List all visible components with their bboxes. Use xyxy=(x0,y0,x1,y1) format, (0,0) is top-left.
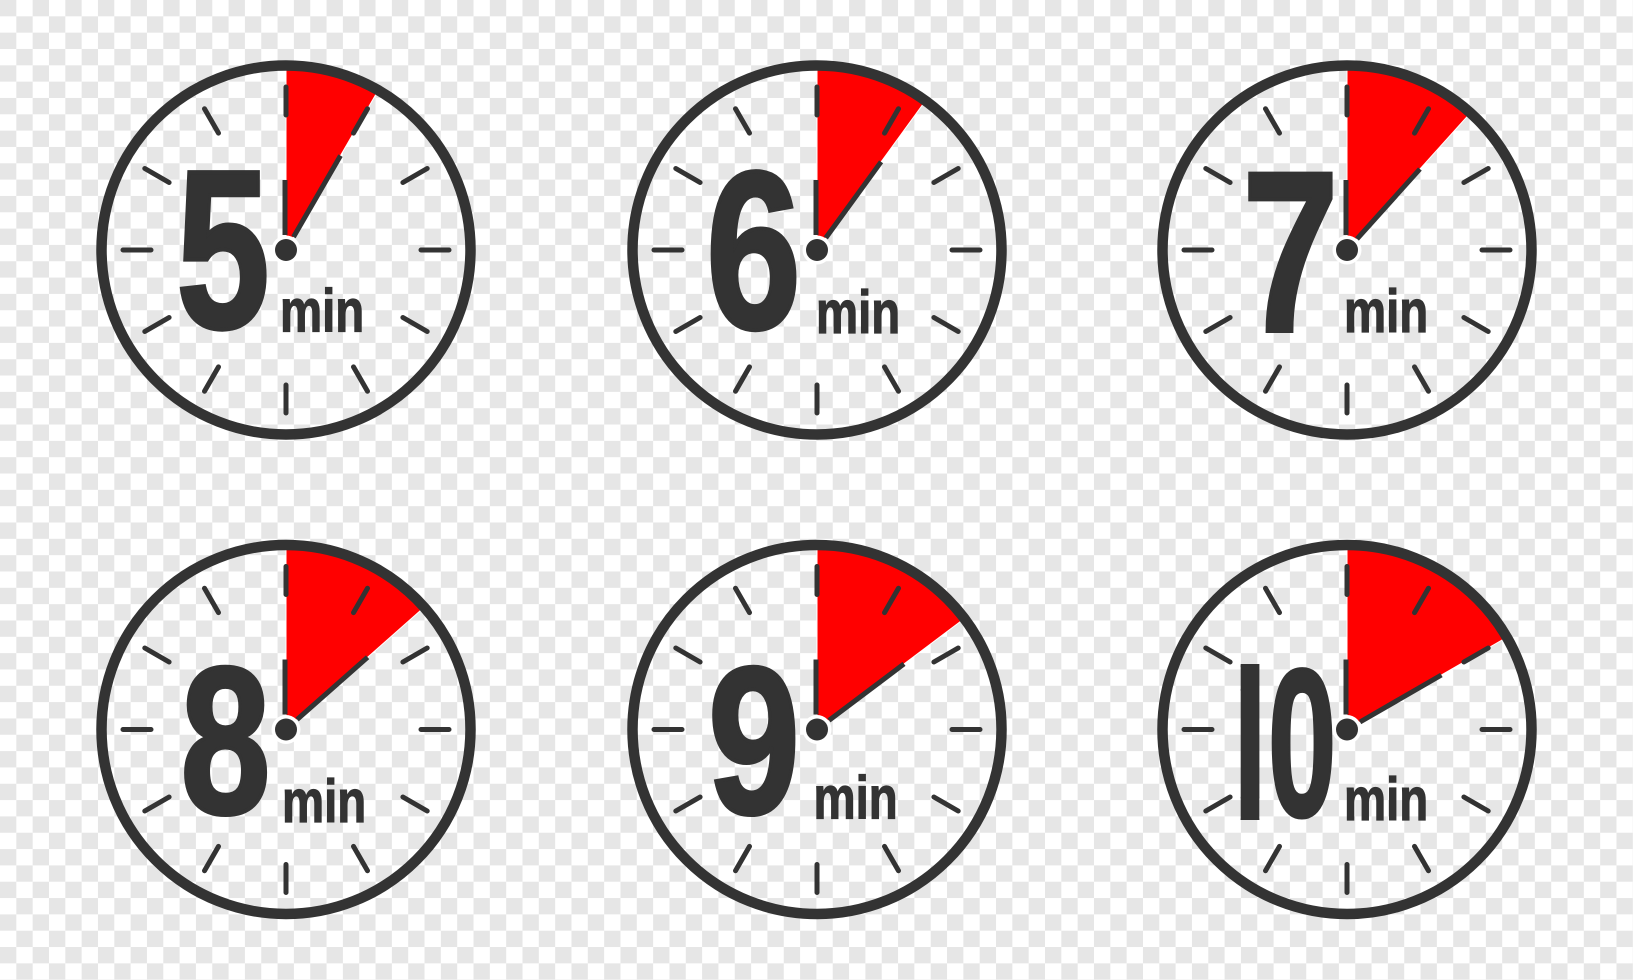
timer: 10 min xyxy=(1162,545,1532,914)
red sector 10 min xyxy=(1347,548,1505,730)
center hub xyxy=(802,236,832,264)
number 7: 7 xyxy=(1242,124,1339,379)
center hub xyxy=(802,715,832,744)
timer: 8 min xyxy=(102,545,470,914)
red sector 5 min xyxy=(286,68,377,250)
outer ring xyxy=(1162,545,1532,914)
label min: min xyxy=(816,280,900,346)
label min: min xyxy=(1344,279,1428,345)
number 5: 5 xyxy=(176,124,270,376)
outer ring xyxy=(102,66,470,434)
center hub xyxy=(1332,236,1362,264)
red sector 6 min xyxy=(817,68,924,250)
outer ring xyxy=(632,66,1002,434)
timer: 5 min xyxy=(102,66,470,434)
label min: min xyxy=(282,769,366,835)
sector edges xyxy=(1346,660,1441,722)
center hub xyxy=(272,715,300,744)
timer: 6 min xyxy=(632,66,1002,434)
timer: 7 min xyxy=(1162,66,1532,434)
outer ring xyxy=(632,545,1002,914)
label min: min xyxy=(1344,767,1428,833)
minute ticks xyxy=(1184,87,1510,413)
minute ticks xyxy=(123,87,449,413)
red sector 8 min xyxy=(286,548,422,730)
number 8: 8 xyxy=(180,624,271,858)
sector edges xyxy=(816,162,881,238)
label min: min xyxy=(814,765,898,832)
outer ring xyxy=(102,545,470,914)
label min: min xyxy=(280,278,364,345)
minute ticks xyxy=(1184,566,1510,892)
number 10: 1 xyxy=(1210,616,1284,869)
timer: 9 min xyxy=(632,545,1002,914)
number 10 xyxy=(1240,664,1332,820)
minute ticks xyxy=(654,87,980,413)
number 6: 6 xyxy=(706,126,801,376)
red sector 9 min xyxy=(817,548,962,730)
number 10: 0 xyxy=(1268,625,1337,861)
minute ticks xyxy=(123,566,449,892)
number 9: 9 xyxy=(708,623,800,857)
center hub xyxy=(1332,715,1362,744)
sector edges xyxy=(285,657,368,720)
red sector 7 min xyxy=(1347,68,1469,250)
timer icon grid xyxy=(96,60,1537,920)
center hub xyxy=(272,236,300,264)
sector edges xyxy=(816,660,904,720)
minute ticks xyxy=(654,566,980,892)
sector edges xyxy=(285,156,340,237)
sector edges xyxy=(1346,169,1420,239)
outer ring xyxy=(1162,66,1532,434)
